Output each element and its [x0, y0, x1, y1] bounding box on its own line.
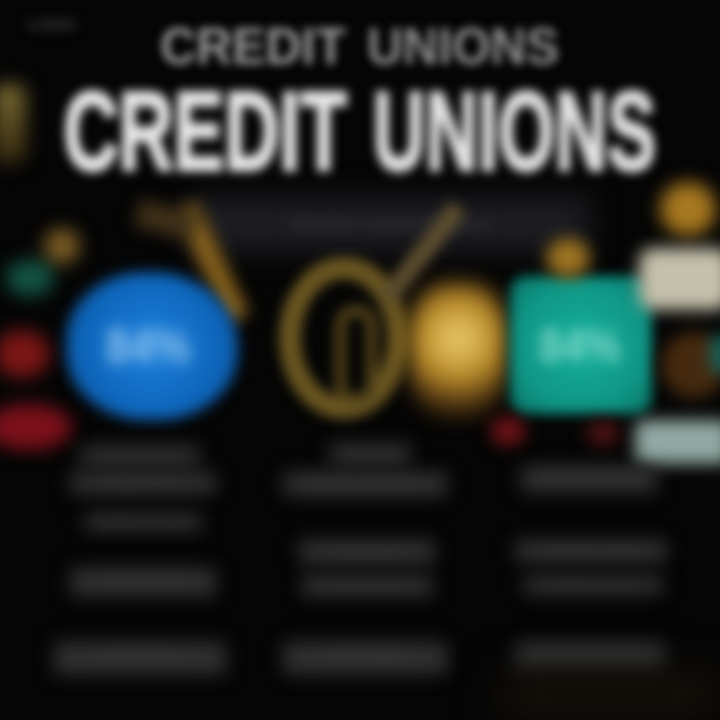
icon: gold coin above teal card	[546, 238, 590, 278]
text row: Fair lending	[328, 644, 402, 660]
text row: Member voting	[545, 542, 637, 558]
text row: Shared ownership	[309, 474, 421, 490]
text row: Better rates	[107, 474, 179, 490]
icon: right decorative stack	[623, 236, 720, 476]
floor glow	[500, 670, 720, 720]
text row: Savings	[345, 446, 395, 462]
text row: Insured deposits	[538, 468, 640, 484]
text row	[283, 642, 447, 674]
text row	[515, 642, 665, 672]
icon: blue circle with percent	[56, 262, 248, 431]
text row	[283, 472, 447, 496]
text row: Online access	[549, 578, 637, 594]
subtitle heading: UNIONS	[367, 18, 559, 76]
text row	[521, 466, 657, 492]
subtitle heading	[156, 18, 563, 76]
text row	[329, 444, 411, 464]
background glow	[190, 196, 590, 252]
panel: middle column text	[276, 436, 454, 682]
text row	[523, 576, 663, 594]
icon: teal card with percent: 84%	[539, 320, 621, 373]
icon: gold coin top right	[660, 182, 716, 236]
text row	[70, 568, 216, 596]
text row: Lower fees	[106, 448, 174, 464]
text row: Local service	[99, 644, 181, 660]
panel: left column text	[47, 438, 233, 682]
text row: Personal loans	[321, 578, 413, 594]
text row	[54, 642, 226, 674]
text row	[515, 540, 667, 562]
icon: gold ring symbol	[272, 198, 469, 426]
text row	[299, 540, 435, 564]
text row: Not for profit	[104, 570, 182, 586]
text row	[80, 446, 200, 466]
small top-left label: LOGO	[28, 17, 76, 34]
main title: UNIONS	[373, 69, 656, 194]
icon: red accents under cards	[482, 407, 626, 455]
icon: golden light burst	[408, 282, 508, 417]
tagline: Member owned finance	[290, 214, 490, 234]
subtitle heading: CREDIT	[160, 18, 346, 76]
icon: teal card with percent	[502, 267, 661, 423]
main title: CREDIT	[63, 69, 347, 194]
text row	[70, 472, 216, 494]
main title	[58, 69, 662, 194]
icon: blue circle with percent: 84%	[105, 318, 191, 374]
icon: gold diagonal ribbon	[128, 194, 256, 330]
icon: left gold accent	[0, 84, 26, 164]
text row: Member dividends	[533, 644, 647, 660]
panel: right column text	[509, 454, 673, 674]
icon: left decorative cluster	[0, 218, 90, 462]
text row	[301, 576, 433, 596]
text row: Community	[332, 542, 402, 558]
